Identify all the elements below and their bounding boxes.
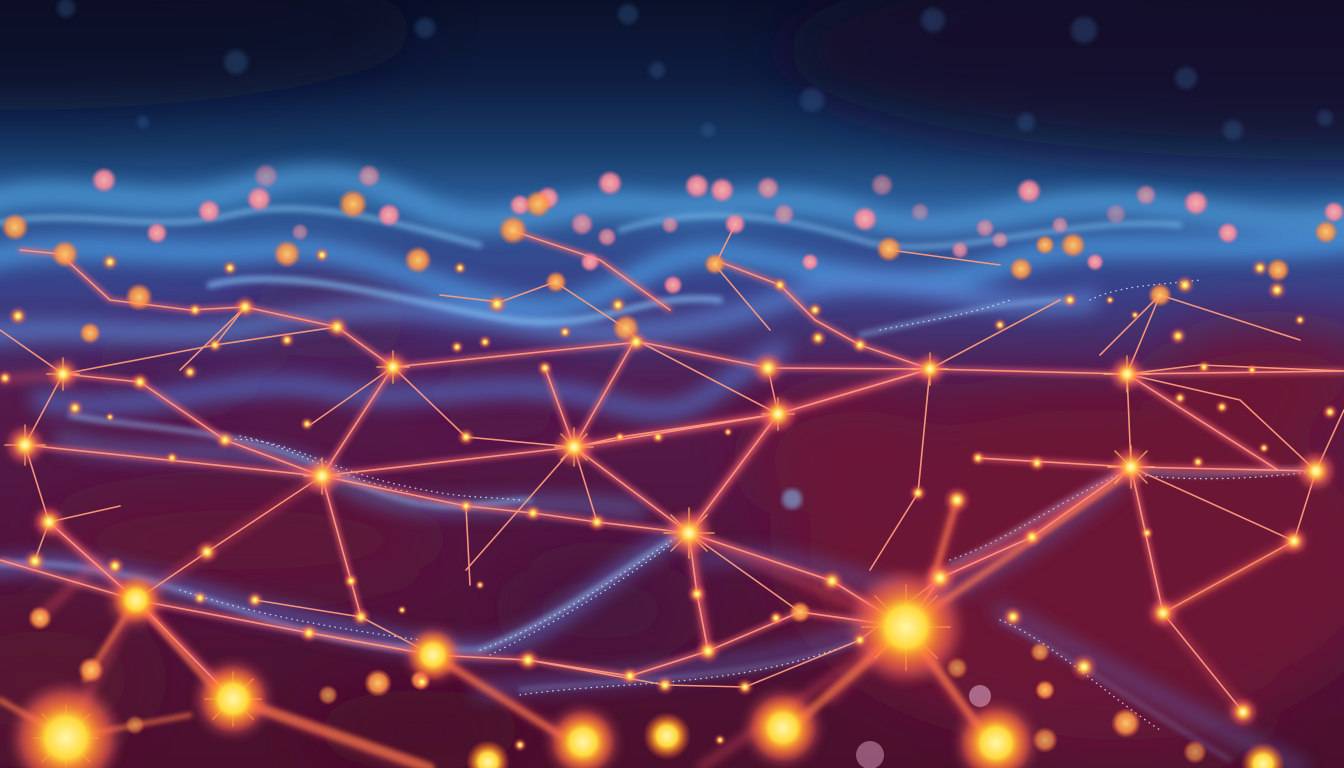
dim out-of-focus particles in the night sky	[57, 0, 1333, 140]
starburst rays on main nodes	[5, 351, 1154, 768]
network edges, sharp	[0, 225, 1344, 712]
amber out-of-focus nodes	[1, 189, 1338, 764]
bokeh pink nodes along the far horizon	[91, 163, 1344, 768]
thick bottom rays	[0, 480, 1290, 768]
large glowing nodes	[18, 576, 1285, 768]
pink halo behind main nodes	[11, 356, 1330, 768]
fine dotted particle strands	[180, 280, 1310, 730]
blue wave streaks, crisp	[0, 208, 1316, 760]
network edges, glow	[0, 369, 1294, 768]
network edges halo copy	[0, 230, 1344, 699]
blue wave streaks, soft	[0, 178, 1344, 768]
medium and small network nodes	[0, 247, 1338, 752]
maroon wave valleys	[0, 291, 1344, 768]
